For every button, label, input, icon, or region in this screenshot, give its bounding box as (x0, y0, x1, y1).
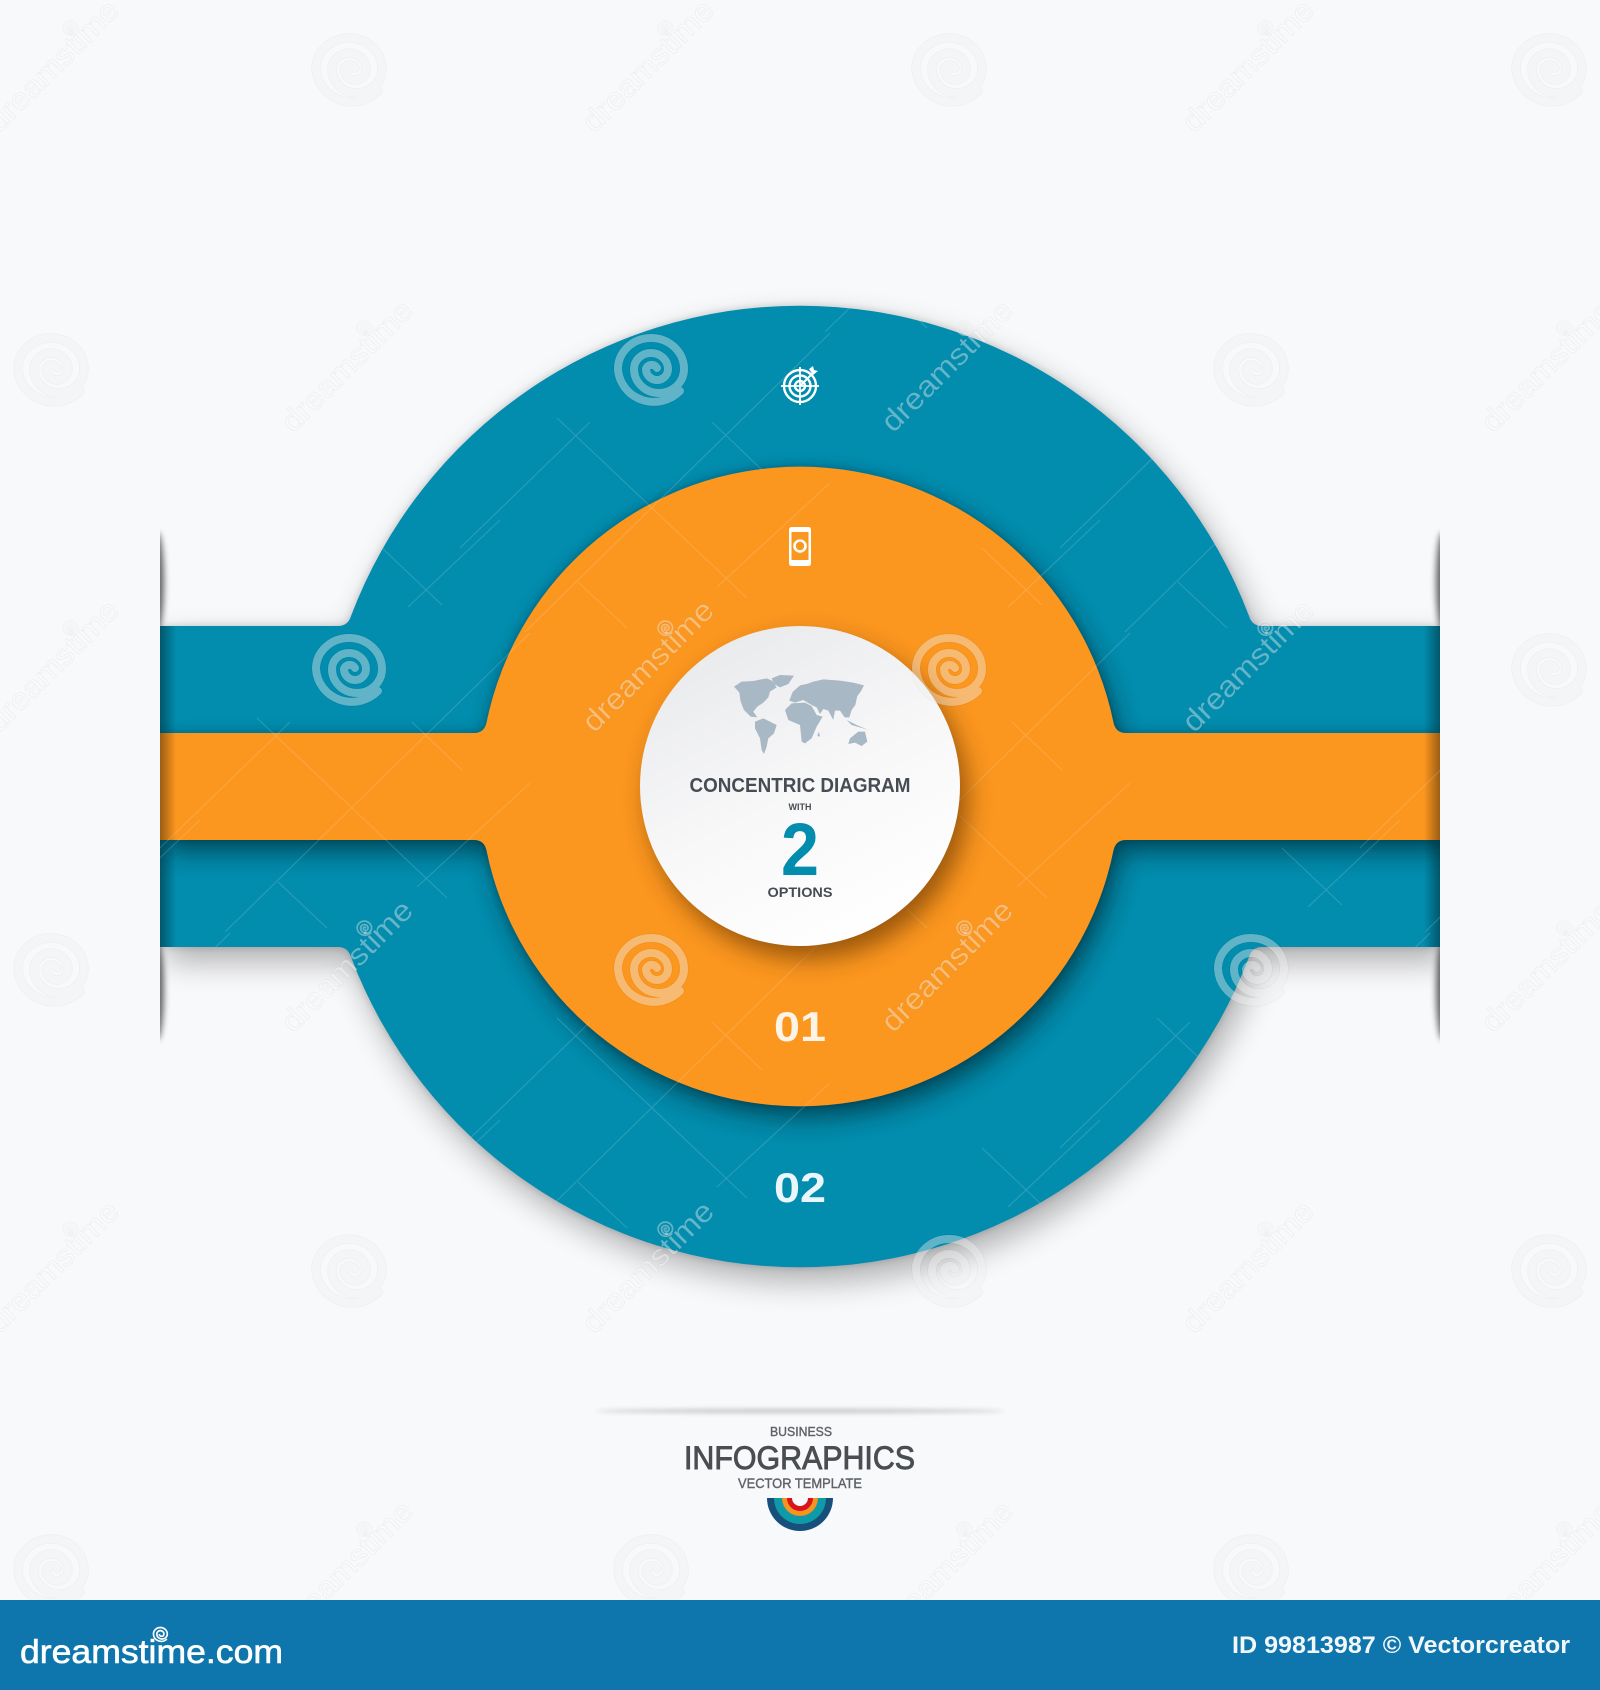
watermark text: dreamstime (1176, 1195, 1321, 1340)
footer logo text: infographics: INFOGRAPHICS (684, 1440, 915, 1476)
shadow: central disc on orange (648, 639, 968, 959)
number: 2: 2 (781, 808, 819, 891)
footer logo text: business: BUSINESS (770, 1424, 832, 1439)
footer logo text: vector template: VECTOR TEMPLATE (738, 1475, 862, 1491)
icon: smartphone (789, 527, 811, 566)
heading: concentric diagram: CONCENTRIC DIAGRAM (690, 775, 910, 797)
icon: logo half rings (767, 1498, 833, 1531)
watermark text: dreamstime (576, 594, 721, 739)
number: 02: 02 (774, 1164, 826, 1211)
footer credit: ID 99813987 © Vectorcreator (1232, 1632, 1570, 1659)
watermark text: dreamstime (1176, 594, 1321, 739)
number: 01: 01 (774, 1003, 826, 1050)
watermark text: dreamstime (576, 0, 721, 139)
band end shading (160, 626, 1440, 947)
watermark text: dreamstime (275, 894, 420, 1039)
panel: teal ring and band (option 02) (160, 306, 1440, 1267)
shadow: teal shape on background (160, 306, 1447, 1281)
text: with: WITH (788, 802, 812, 812)
watermark text: dreamstime (576, 1195, 721, 1340)
watermark text: dreamstime (875, 294, 1020, 439)
watermark text: dreamstime (1176, 0, 1321, 139)
footer bar (0, 1600, 1600, 1690)
watermark text: dreamstime (875, 1495, 1020, 1640)
watermark text: dreamstime (275, 294, 420, 439)
divider shadow line (595, 1409, 1005, 1413)
shadow streaks at band ends (150, 532, 1450, 1040)
panel: orange ring and band (option 01) (160, 467, 1440, 1106)
icon: world map (734, 675, 868, 754)
text: options: OPTIONS (768, 884, 832, 900)
watermark text: dreamstime (875, 894, 1020, 1039)
central disc (640, 626, 960, 946)
icon: target (781, 366, 819, 405)
shadow: orange shape on teal (160, 467, 1446, 1118)
footer brand: dreamstime.com: dreamstime.com (20, 1633, 283, 1670)
watermark text: dreamstime (275, 1495, 420, 1640)
watermark diagonal lines on coloured shapes (160, 308, 1440, 1238)
